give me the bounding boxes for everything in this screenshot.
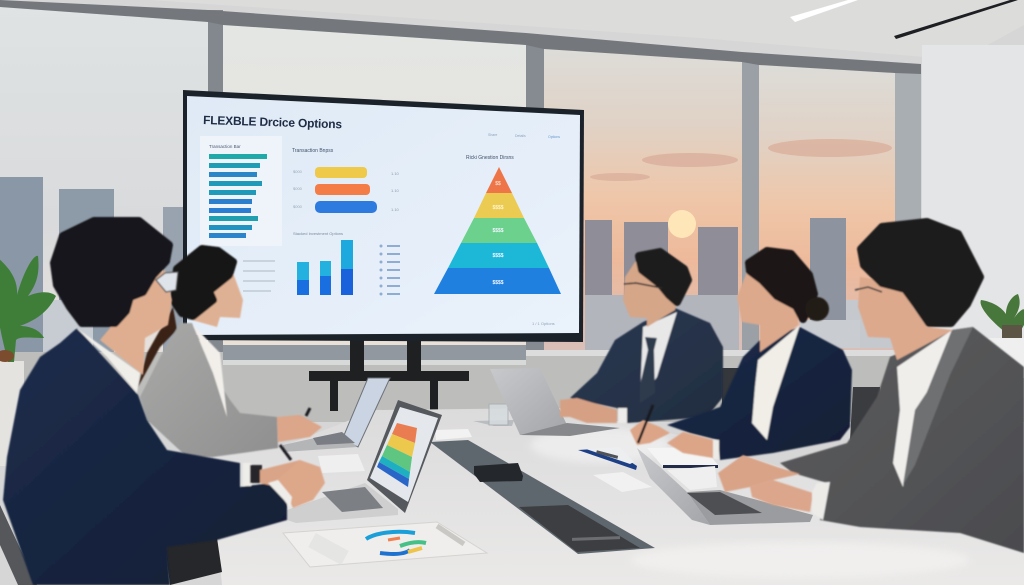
person: man in navy suit centre	[560, 252, 723, 423]
clipboard	[578, 447, 637, 470]
printed report with chart	[283, 522, 487, 567]
paper under woman's hand	[318, 454, 365, 473]
person: woman in navy blazer	[630, 251, 852, 460]
screen header links: Details	[515, 134, 526, 138]
panel: pyramid chart	[434, 155, 561, 294]
panel: horizontal option bars: Transaction Bnpss	[292, 148, 334, 154]
display stand	[309, 340, 469, 411]
panel: pyramid chart: Ricki Gnestion Dirsns	[466, 155, 514, 161]
note under laptop	[435, 429, 472, 440]
conference table	[213, 404, 1024, 585]
plant left	[0, 256, 56, 466]
chairs background	[722, 368, 880, 440]
papers on table	[593, 447, 718, 492]
chair and chair arm at left	[0, 505, 222, 585]
window panes with skyline	[0, 7, 895, 367]
panel: horizontal option bars: 1.10	[391, 207, 400, 212]
screen footer: 1 / 1 Options	[532, 321, 555, 326]
table console strip	[430, 440, 655, 554]
window frames	[0, 0, 921, 360]
panel: stacked column chart	[293, 231, 400, 296]
panel: left list bars: Transaction Bar	[209, 144, 241, 149]
panel: small text notes	[243, 260, 275, 292]
wall display screen	[183, 90, 584, 342]
sunset clouds	[590, 139, 892, 181]
water glass	[473, 404, 514, 426]
panel: horizontal option bars: $000	[293, 186, 303, 191]
screen header links	[488, 133, 560, 139]
panel: pyramid chart: $$$$	[492, 280, 504, 286]
panel: left list bars	[200, 136, 282, 246]
skyline buildings right	[585, 218, 895, 350]
plant right	[981, 294, 1024, 338]
black device	[474, 463, 523, 482]
screen header links: Share	[488, 133, 497, 137]
screen header links: Options	[548, 135, 560, 139]
laptop: left back	[283, 378, 390, 452]
person: woman in grey blazer	[138, 249, 322, 457]
lower wall below window	[0, 338, 1024, 422]
laptop: front with colourful pyramid	[287, 400, 442, 523]
panel: horizontal option bars: 1.10	[391, 171, 400, 176]
person: man in navy jacket front left	[3, 221, 325, 585]
panel: horizontal option bars	[292, 148, 400, 213]
skyline buildings left	[0, 177, 183, 367]
panel: stacked column chart: Stacked Investment Options	[293, 231, 343, 236]
panel: pyramid chart: $$	[495, 181, 501, 187]
sun	[668, 210, 696, 238]
laptop: front right	[637, 448, 813, 525]
person: man in grey suit right	[718, 222, 1024, 553]
panel: horizontal option bars: $000	[293, 169, 303, 174]
panel: pyramid chart: $$$$	[492, 253, 504, 259]
panel: horizontal option bars: 1.10	[391, 188, 400, 193]
panel: pyramid chart: $$$$	[492, 228, 504, 234]
panel: pyramid chart: $$$$	[492, 205, 504, 211]
screen title: FLEXBLE Drcice Options	[203, 113, 343, 131]
panel: horizontal option bars: $000	[293, 204, 303, 209]
laptop: centre back	[490, 368, 620, 436]
